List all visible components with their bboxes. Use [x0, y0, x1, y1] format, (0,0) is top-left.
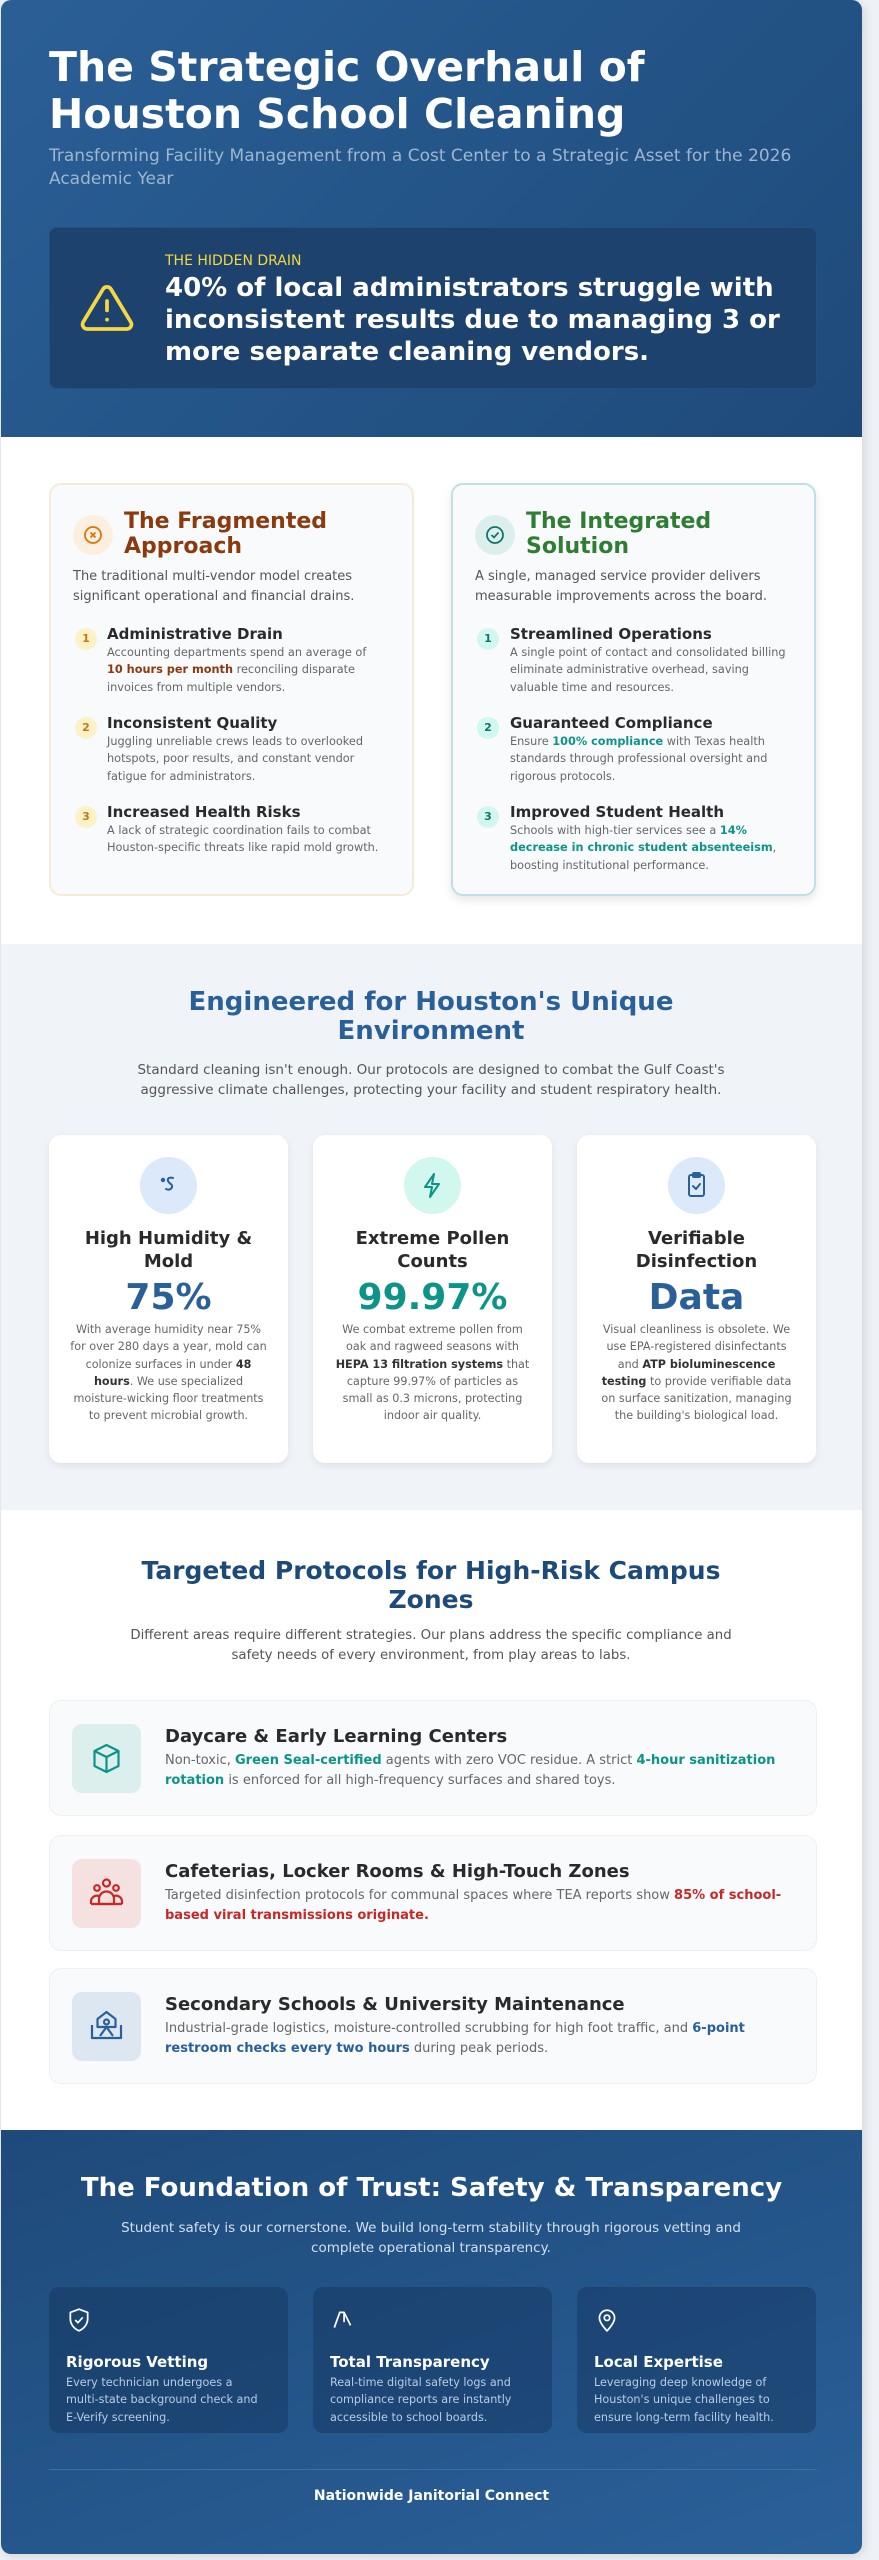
subtitle: Student safety is our cornerstone. We build long-term stability through rigorous vetting and complete operational transparency. — [121, 2220, 741, 2256]
icon: bolt — [404, 1157, 461, 1214]
card: humidity: High Humidity & Mold — [85, 1228, 252, 1272]
panel: fragmented approach — [49, 483, 414, 896]
callout label: THE HIDDEN DRAIN — [165, 253, 301, 269]
panel: integrated solution — [451, 483, 816, 896]
section: targeted protocols heading: Targeted Protocols for High-Risk Campus Zones — [141, 1556, 720, 1614]
subtitle: Standard cleaning isn't enough. Our protocols are designed to combat the Gulf Coast's aggressive climate challenges, protecting your facility and student respiratory health. — [137, 1062, 725, 1098]
card: daycare: Daycare & Early Learning Centers — [165, 1726, 507, 1747]
card: pollen: We combat extreme pollen from oak and ragweed seasons with HEPA 13 filtration systems that capture 99.97% of particles as small as 0.3 microns, protecting indoor air quality. — [336, 1323, 529, 1422]
card: pollen — [313, 1135, 552, 1463]
heading: The Integrated — [526, 509, 711, 534]
description: The traditional multi-vendor model creates significant operational and financial drains. — [73, 569, 354, 604]
card: transparency: Real-time digital safety logs and compliance reports are instantly accessible to school boards. — [330, 2376, 511, 2424]
card: pollen: Extreme Pollen Counts — [356, 1228, 509, 1272]
panel: integrated solution: valuable time and resources. — [510, 681, 674, 694]
card: disinfection: Visual cleanliness is obsolete. We use EPA-registered disinfectants and ATP bioluminescence testing to provide verifiable data on surface sanitization, managing the building's biological load. — [601, 1323, 792, 1422]
heading: Engineered for Houston's Unique Environment — [189, 987, 673, 1046]
card: cafeterias: Targeted disinfection protocols for communal spaces where TEA reports show 85% of school-based viral transmissions originate. — [165, 1888, 781, 1923]
icon: cube — [72, 1724, 141, 1793]
card: humidity: 75% — [125, 1277, 212, 1318]
title: The Strategic Overhaul of — [49, 43, 645, 91]
item 3 — [75, 803, 378, 854]
panel: integrated solution: A single point of contact and consolidated billing eliminate administrative overhead, saving — [510, 646, 786, 676]
card: disinfection: Verifiable Disinfection — [636, 1228, 757, 1272]
subtitle: Transforming Facility Management from a Cost Center to a Strategic Asset for the 2026 Academic Year — [49, 146, 791, 189]
card: cafeterias: Cafeterias, Locker Rooms & High-Touch Zones — [165, 1861, 630, 1882]
panel: fragmented approach: Increased Health Risks — [107, 803, 300, 821]
item 1 — [75, 625, 367, 694]
section: foundation of trust — [1, 2130, 862, 2554]
panel: integrated solution: Streamlined Operations — [510, 625, 712, 643]
panel: integrated solution: 1 — [484, 632, 492, 645]
panel: integrated solution: 3 — [484, 810, 492, 823]
icon: clipboard — [668, 1157, 725, 1214]
callout statement: 40% of local administrators struggle with inconsistent results due to managing 3 or more separate cleaning vendors. — [165, 273, 780, 367]
panel: fragmented approach: 3 — [82, 810, 90, 823]
heading: The Fragmented — [124, 509, 327, 534]
icon: x circle — [73, 515, 113, 555]
icon: droplets — [140, 1157, 197, 1214]
card: daycare — [49, 1700, 817, 1816]
panel: integrated solution: Guaranteed Compliance — [510, 714, 713, 732]
card: disinfection — [577, 1135, 816, 1463]
card: vetting: Rigorous Vetting — [66, 2353, 208, 2371]
panel: fragmented approach: Administrative Drain — [107, 625, 283, 643]
card: transparency: Total Transparency — [330, 2353, 490, 2371]
heading — [526, 509, 711, 559]
item 2 — [75, 714, 363, 783]
icon: shield — [69, 2308, 89, 2332]
card: secondary schools: Industrial-grade logistics, moisture-controlled scrubbing for high foot traffic, and 6-point restroom checks every two hours during peak periods. — [165, 2021, 745, 2056]
card: pollen: 99.97% — [358, 1277, 507, 1318]
card: cafeterias — [49, 1835, 817, 1951]
card: humidity: With average humidity near 75% for over 280 days a year, mold can colonize surfaces in under 48 hours. We use specialized moisture-wicking floor treatments to prevent microbial growth. — [70, 1323, 267, 1422]
card: local expertise: Leveraging deep knowledge of Houston's unique challenges to ensure long-term facility health. — [594, 2376, 774, 2424]
heading: Approach — [124, 534, 242, 559]
icon: warning — [80, 285, 134, 331]
panel: integrated solution: Improved Student Health — [510, 803, 724, 821]
card: transparency — [313, 2287, 552, 2433]
card: secondary schools: Secondary Schools & University Maintenance — [165, 1994, 625, 2015]
panel: fragmented approach: A lack of strategic coordination fails to combat Houston-specific threats like rapid mold growth. — [107, 824, 378, 854]
protocols subtitle: Different areas require different strategies. Our plans address the specific compliance and safety needs of every environment, from play areas to labs. — [130, 1628, 732, 1663]
title — [49, 43, 645, 138]
panel: fragmented approach: 1 — [82, 632, 90, 645]
panel: integrated solution: 2 — [484, 721, 492, 734]
panel: fragmented approach: Inconsistent Quality — [107, 714, 277, 732]
card: daycare: Non-toxic, Green Seal-certified agents with zero VOC residue. A strict 4-hour sanitization rotation is enforced for all high-frequency surfaces and shared toys. — [165, 1753, 775, 1788]
card: secondary schools — [49, 1968, 817, 2084]
icon: check circle — [475, 515, 515, 555]
card: humidity — [49, 1135, 288, 1463]
item 3 — [477, 803, 776, 872]
card: vetting — [49, 2287, 288, 2433]
item 1 — [477, 625, 786, 694]
item 2 — [477, 714, 767, 783]
heading: Solution — [526, 534, 629, 559]
icon: map pin — [598, 2309, 616, 2332]
footer brand: Nationwide Janitorial Connect — [314, 2488, 549, 2504]
icon: chart — [334, 2312, 352, 2328]
card: local expertise: Local Expertise — [594, 2353, 723, 2371]
heading — [124, 509, 327, 559]
panel: fragmented approach: 2 — [82, 721, 90, 734]
description: A single, managed service provider delivers measurable improvements across the board. — [475, 569, 767, 604]
card: disinfection: Data — [649, 1277, 744, 1318]
title: Houston School Cleaning — [49, 90, 625, 138]
header section — [1, 0, 862, 437]
panel: fragmented approach: Juggling unreliable crews leads to overlooked hotspots, poor results, and constant vendor fatigue for administrators. — [107, 735, 363, 783]
icon: people — [72, 1859, 141, 1928]
callout: hidden drain — [49, 227, 817, 389]
panel: fragmented approach: Accounting departments spend an average of 10 hours per month reconciling disparate invoices from multiple vendors. — [107, 646, 366, 694]
icon: school — [72, 1992, 141, 2061]
card: local expertise — [577, 2287, 816, 2433]
section: houston environment — [1, 944, 862, 1510]
panel: integrated solution: Ensure 100% compliance with Texas health standards through professional oversight and rigorous protocols. — [510, 735, 767, 783]
panel: integrated solution: Schools with high-tier services see a 14% decrease in chronic student absenteeism, boosting institutional performance. — [510, 824, 776, 872]
card: vetting: Every technician undergoes a multi-state background check and E-Verify screening. — [66, 2376, 258, 2424]
heading: The Foundation of Trust: Safety & Transparency — [81, 2173, 782, 2203]
